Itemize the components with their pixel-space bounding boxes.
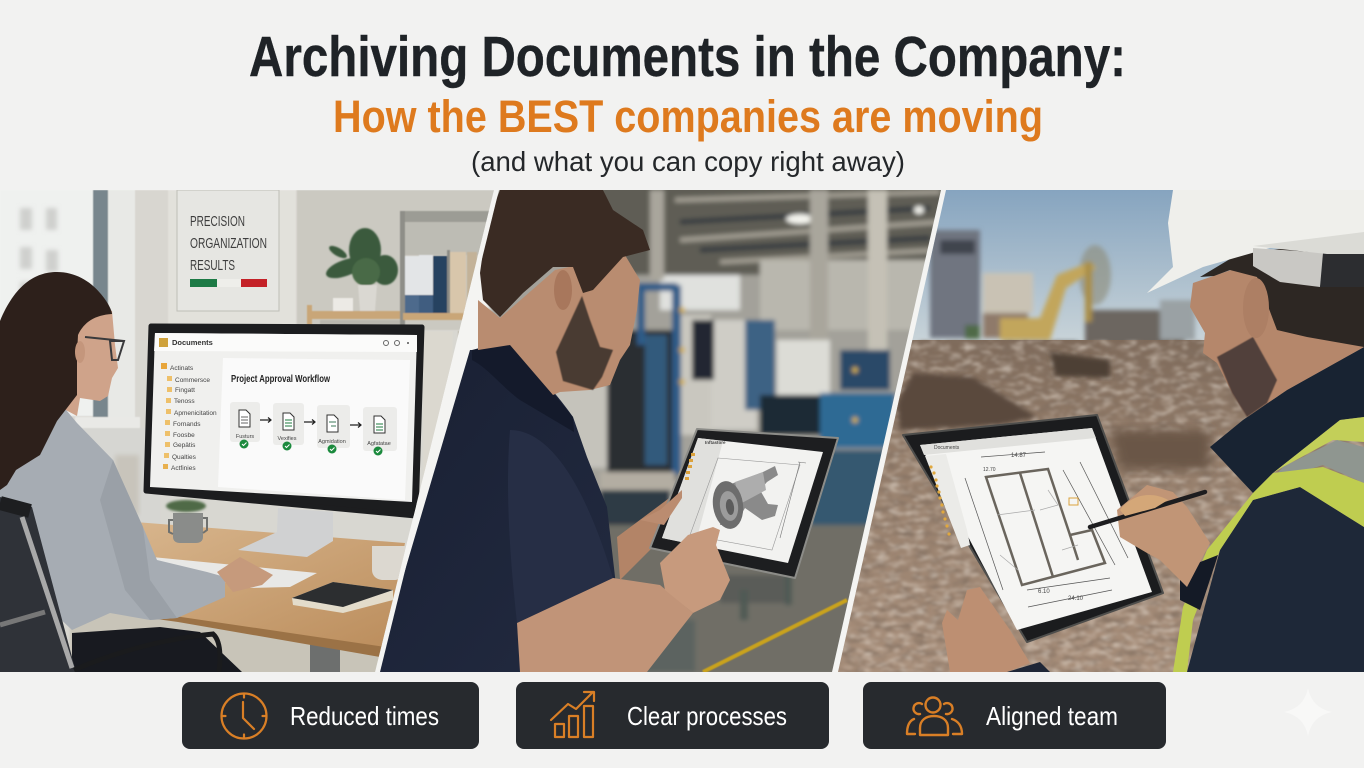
blurred factory background xyxy=(490,180,950,680)
cuff xyxy=(1180,555,1218,610)
app logo xyxy=(159,338,168,347)
icon: rising bar chart xyxy=(551,692,594,737)
vest reflective band xyxy=(1270,440,1364,483)
polo shirt xyxy=(375,350,625,672)
workflow steps: Agfatatae xyxy=(367,441,391,447)
panel: construction site scene xyxy=(830,190,1364,675)
folder tree: Apmenicitation xyxy=(174,410,217,417)
hair xyxy=(1200,240,1364,347)
forearm xyxy=(517,578,693,672)
left hand xyxy=(942,587,1030,672)
workflow title: Project Approval Workflow xyxy=(231,374,330,385)
screen xyxy=(150,333,417,502)
dimension labels: 12.70 xyxy=(983,467,996,473)
folder tree: Qualties xyxy=(172,454,197,461)
dimension labels: 6.10 xyxy=(1038,589,1050,595)
wall sign: PRECISION xyxy=(190,213,245,230)
orange marker xyxy=(1069,498,1078,505)
panel: factory scene xyxy=(375,180,950,680)
gravel ground xyxy=(830,340,1364,675)
dimension labels: 14.87 xyxy=(1011,453,1027,459)
wall sign: ORGANIZATION xyxy=(190,235,267,252)
monitor frame xyxy=(146,326,422,516)
title block xyxy=(249,25,1126,177)
chair xyxy=(0,497,76,672)
office wall and window xyxy=(0,190,500,672)
drawing frame xyxy=(690,458,800,550)
workflow card xyxy=(218,358,410,500)
glasses xyxy=(85,337,124,360)
machined part xyxy=(710,466,778,531)
shelf with plant and binders xyxy=(306,210,489,473)
hard hat xyxy=(1147,190,1364,293)
keyboard, mugs, notebook xyxy=(152,500,405,613)
site engineer xyxy=(1147,190,1364,672)
label: Reduced times xyxy=(290,701,439,731)
folder tree: Fingatt xyxy=(175,387,195,394)
floor xyxy=(70,612,390,672)
folder column xyxy=(929,465,951,536)
app name: Inftastore xyxy=(705,440,726,445)
yellow floor line xyxy=(703,600,847,672)
beard xyxy=(556,296,613,390)
ear xyxy=(75,341,85,363)
app name: Documents xyxy=(934,445,960,451)
tablet with 3D part xyxy=(640,429,838,613)
label: Aligned team xyxy=(986,701,1118,731)
icon: team xyxy=(907,698,962,735)
stylus xyxy=(1090,492,1205,527)
dimension labels: 24.10 xyxy=(1068,596,1084,602)
workflow steps: Vexifies xyxy=(278,436,297,442)
monitor with document workflow: Documents xyxy=(172,338,213,347)
sleeve shading xyxy=(508,430,602,622)
finger over stylus xyxy=(1120,495,1168,516)
subtitle: orange heading: How the BEST companies are moving xyxy=(333,91,1043,142)
stat bar: reduced times xyxy=(182,682,479,749)
workflow steps: Fusturs xyxy=(236,434,254,440)
vest lower band xyxy=(1173,467,1364,672)
beard xyxy=(1217,337,1277,417)
tablet with floor plan xyxy=(903,415,1163,642)
folder tree: Actinats xyxy=(170,365,194,372)
jacket sleeve xyxy=(1187,487,1364,672)
sparkle watermark xyxy=(1284,688,1332,736)
workflow steps: Agmidation xyxy=(318,439,346,445)
ear xyxy=(554,270,572,310)
engineer xyxy=(375,190,693,672)
folder tree: Gepätis xyxy=(173,442,196,449)
folder tree: Tenoss xyxy=(174,398,195,405)
dimension lines xyxy=(780,462,806,538)
photo strip backing with white dividers xyxy=(0,190,1364,672)
jacket collar xyxy=(1210,347,1364,493)
folder tree: Foosbe xyxy=(173,432,195,439)
shirt xyxy=(0,405,225,630)
icon: clock xyxy=(222,694,266,738)
left forearm behind tablet xyxy=(617,498,668,580)
desk xyxy=(141,522,405,672)
sky xyxy=(840,190,1364,350)
wall sign: RESULTS xyxy=(190,257,235,274)
folder tree xyxy=(161,363,217,472)
folder tree: Fornands xyxy=(173,421,201,428)
monitor with document workflow xyxy=(146,326,422,557)
sidebar folders xyxy=(685,453,695,480)
hair xyxy=(480,190,650,317)
vest upper band xyxy=(1273,417,1364,473)
stat bar: clear processes xyxy=(516,682,829,749)
subtitle: parenthetical: (and what you can copy right away) xyxy=(471,146,905,177)
neck and face xyxy=(478,255,640,395)
neck and face xyxy=(66,310,118,416)
workflow steps xyxy=(230,402,397,456)
collar xyxy=(472,340,574,432)
dimension lines xyxy=(965,452,1128,607)
blurred buildings and excavator xyxy=(930,230,1195,353)
hand xyxy=(217,557,273,592)
neck and face xyxy=(1190,260,1364,417)
woman at desk xyxy=(0,272,273,672)
ear xyxy=(1243,278,1269,338)
label: Clear processes xyxy=(627,701,787,731)
panel: office scene xyxy=(0,190,500,680)
stylus and hands xyxy=(942,485,1210,672)
right hand xyxy=(1117,485,1210,587)
trousers xyxy=(72,627,242,672)
wall sign xyxy=(177,190,279,311)
stat bar: aligned team xyxy=(863,682,1166,749)
monitor stand xyxy=(238,533,333,557)
thumb fingers xyxy=(640,490,682,525)
hair xyxy=(0,272,112,490)
room details xyxy=(997,490,1078,570)
dimension labels xyxy=(983,453,1084,602)
folder tree: Actfinies xyxy=(171,465,196,472)
folder tree: Commersce xyxy=(175,377,210,384)
floor plan walls xyxy=(986,469,1105,585)
pointing hand xyxy=(660,527,730,613)
window controls xyxy=(384,340,400,346)
title: main heading: Archiving Documents in the Company: xyxy=(249,25,1126,89)
